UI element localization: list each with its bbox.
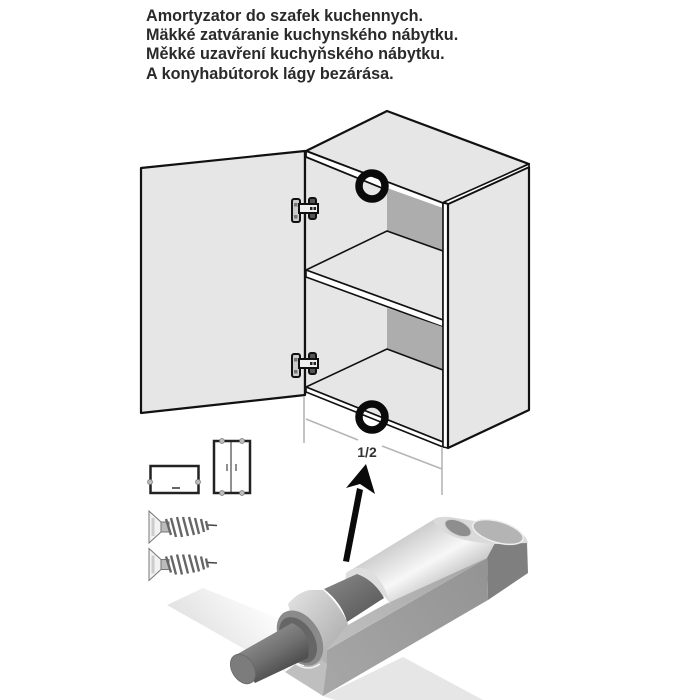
icon: upper hinge	[292, 198, 318, 222]
shelf front edge	[306, 270, 443, 327]
marker ring: bottom position	[359, 404, 385, 430]
damper end face	[487, 542, 528, 600]
cabinet right side	[448, 167, 529, 448]
middle shelf	[306, 231, 443, 320]
damper cylinder body	[346, 520, 495, 628]
front collar	[288, 590, 348, 670]
front face	[285, 660, 327, 696]
strip below window	[327, 558, 487, 650]
collar inner	[271, 610, 325, 670]
cabinet interior	[305, 151, 445, 447]
icon: screw two	[149, 548, 217, 580]
floor shadow: right	[323, 657, 483, 700]
bottom shelf	[306, 349, 443, 442]
icon: screw one	[149, 511, 217, 543]
mounting cap	[433, 517, 528, 544]
plunger tip	[225, 650, 261, 688]
title: multilingual product text	[146, 7, 458, 83]
title: multilingual product text: A konyhabútorok lágy bezárása.	[146, 65, 394, 83]
mounting slot	[442, 516, 474, 540]
mounting hole	[470, 515, 526, 549]
marker ring: top position	[359, 173, 385, 199]
floor shadow: left	[167, 588, 295, 672]
title: multilingual product text: Mäkké zatváranie kuchynského nábytku.	[146, 26, 458, 44]
upper back panel	[387, 188, 443, 251]
window rim	[345, 568, 390, 604]
dimension label: 1/2	[357, 444, 377, 460]
cabinet illustration	[141, 111, 529, 448]
collar ring	[267, 602, 333, 674]
window slit	[345, 596, 389, 625]
title: multilingual product text: Měkké uzavření kuchyňského nábytku.	[146, 45, 445, 63]
title: multilingual product text: Amortyzator do szafek kuchennych.	[146, 7, 423, 25]
top front edge	[306, 151, 443, 213]
hinge line	[304, 151, 306, 395]
cabinet door	[141, 151, 305, 413]
lower back panel	[387, 308, 443, 370]
plunger pin	[234, 623, 309, 683]
side top edge	[444, 164, 529, 204]
icon: lower hinge	[292, 353, 318, 377]
vertical front edge	[443, 203, 448, 448]
icon: double door diagram	[214, 438, 250, 496]
cabinet top	[306, 111, 529, 204]
bottom front edge	[306, 387, 443, 447]
arrow	[343, 464, 375, 562]
arc under collar	[296, 664, 320, 668]
dimension lines	[304, 396, 442, 495]
inner piston	[324, 574, 384, 622]
soft-close damper illustration	[167, 515, 528, 700]
icon: single door diagram	[148, 466, 200, 493]
damper side face	[323, 558, 488, 696]
